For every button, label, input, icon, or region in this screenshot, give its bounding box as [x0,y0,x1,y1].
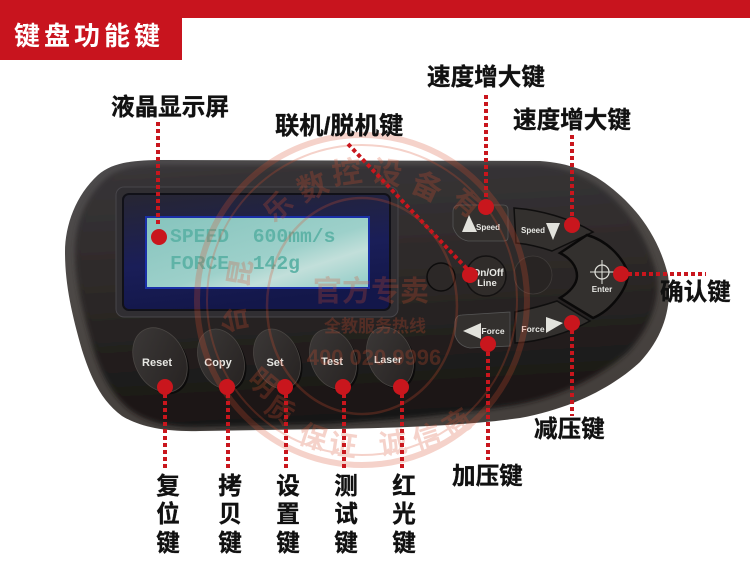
enter key [560,235,628,318]
label: set key [276,473,300,557]
label: speed up key: 速度增大键 [427,64,545,91]
label: test key: 键 [334,530,358,557]
label: set key: 设 [276,473,300,500]
LCD readout: FORCE 142g [170,253,300,275]
label: laser key: 光 [392,501,416,528]
watermark stamp: 台 [217,303,253,337]
label: copy key: 键 [218,530,242,557]
watermark stamp: 官方专卖 [313,275,429,308]
watermark stamp: 控 [330,155,364,192]
watermark stamp: 有 [446,183,487,224]
small round key [427,263,455,291]
label: laser key [392,473,416,557]
function buttons row: Reset [142,357,172,369]
watermark stamp: 证 [327,428,359,463]
watermark stamp: 商 [437,403,477,444]
force right key: Force [521,324,545,334]
label: copy key: 贝 [218,502,242,528]
label: test key: 试 [334,501,358,528]
watermark stamp: 备 [406,166,447,209]
label: test key: 测 [334,473,358,500]
device body [65,160,669,431]
enter key: Enter [592,285,612,294]
speed up key: Speed [476,223,500,232]
label: reset key: 位 [156,500,180,528]
label: set key: 置 [276,502,300,528]
label: reset key: 复 [156,473,180,500]
on/off line key [466,256,506,296]
speed down key [514,208,593,251]
label: laser key: 红 [392,473,416,500]
watermark stamp: 乐 [258,186,299,228]
label: copy key: 拷 [218,473,242,500]
LCD bezel [116,187,398,317]
header banner [0,0,750,60]
label: reset key: 键 [156,530,180,557]
function buttons row: Copy [204,357,233,369]
force left key [455,312,510,348]
watermark stamp [197,135,527,465]
LCD screen [146,217,369,288]
watermark stamp: 设 [370,155,404,192]
label: decrease force key: 减压键 [534,416,605,443]
callout dots [151,199,629,395]
header title: 键盘功能键 [14,21,164,51]
watermark stamp: 全教服务热线 [324,316,426,336]
watermark stamp: 昆 [223,257,258,290]
watermark stamp: 保 [295,418,331,457]
label: copy key [218,473,242,557]
navigation key cluster [427,205,628,348]
function buttons row: Laser [374,354,402,366]
LCD readout [170,226,335,275]
LCD readout: SPEED 600mm/s [170,226,335,248]
watermark stamp: 明 [242,363,283,404]
label: set key: 键 [276,530,300,557]
force right key [515,301,590,343]
callout lines [158,95,706,468]
label: LCD: 液晶显示屏 [111,94,229,121]
watermark stamp: 信 [409,418,445,457]
watermark stamp: 质 [260,390,300,431]
label: laser key: 键 [392,530,416,557]
force left key: Force [481,326,505,336]
speed down key: Speed [521,226,545,235]
function buttons row: Test [321,356,343,368]
function buttons row [122,318,424,404]
watermark stamp: 诚 [377,425,409,461]
on/off line key: Line [477,278,497,289]
label: online/offline key: 联机/脱机键 [275,113,403,140]
label: enter key: 确认键 [660,279,731,306]
function buttons row: Set [266,357,284,369]
label: increase force key: 加压键 [452,463,523,490]
speed up key [453,205,508,241]
watermark stamp: 数 [293,166,334,209]
on/off line key: On/Off [472,268,504,279]
label: test key [334,473,358,557]
label: reset key [156,473,180,557]
watermark stamp: 400 020 9996 [307,345,441,370]
label: speed down key: 速度增大键 [513,107,631,134]
control panel device [65,160,669,431]
